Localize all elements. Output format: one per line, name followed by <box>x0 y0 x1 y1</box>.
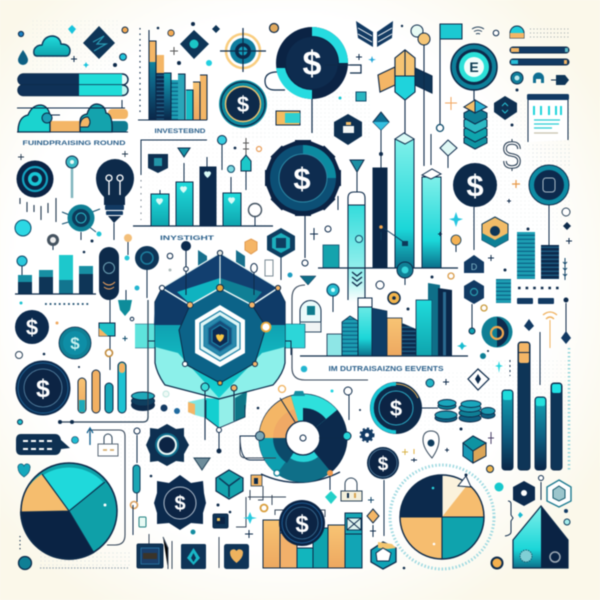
progress bars <box>18 74 128 96</box>
slider bars <box>510 47 569 65</box>
pie chart left <box>20 463 117 560</box>
small icons top left <box>18 25 128 68</box>
panel: invest chart <box>133 140 273 226</box>
icon: cloud <box>34 36 70 56</box>
small items centre lower <box>130 428 219 569</box>
lower tail <box>188 391 247 428</box>
bar chart: bottom centre <box>263 518 362 568</box>
icon: crossed box <box>345 513 362 534</box>
bottom left dot and dotted strip <box>18 536 128 570</box>
coin: dollar with ring: $ <box>390 396 402 421</box>
icon: 3D arrow block <box>378 50 432 135</box>
icon: coin stack left <box>132 392 154 410</box>
coin: dollar left top: $ <box>237 92 249 117</box>
icon: navy house: D <box>471 262 478 272</box>
wifi orange and spades <box>524 303 571 385</box>
dotted grid top right <box>530 29 570 37</box>
icon: chain link <box>505 139 519 171</box>
card: heart <box>224 544 249 569</box>
label: insight: INYSTIGHT <box>160 235 214 242</box>
icon: navy star gear <box>146 424 189 466</box>
pin fading <box>66 156 78 198</box>
top tabs <box>198 250 245 268</box>
icon: stacked rings <box>411 25 430 166</box>
central shield <box>135 241 305 454</box>
small icons right of shield <box>300 273 454 322</box>
gauge bars right <box>502 342 569 470</box>
icon: bronze dot <box>270 24 278 32</box>
icon: lock connector <box>292 285 368 380</box>
flag <box>436 24 462 132</box>
icon: orange hexagon core <box>482 217 508 247</box>
coin: dollar big left <box>16 360 70 416</box>
icon: wings <box>356 21 393 47</box>
small icons row <box>511 72 569 85</box>
lock diagram <box>87 428 125 545</box>
side band <box>135 324 305 355</box>
coin: dollar right <box>453 163 497 250</box>
gear with dollar <box>265 140 341 266</box>
small icons top middle <box>157 22 220 66</box>
icon: gear target <box>62 204 100 240</box>
card: flame <box>181 544 206 569</box>
icon: heart small <box>18 464 30 477</box>
icons top right row <box>493 26 524 38</box>
coin: big top dollar: $ <box>303 45 322 83</box>
icon: navy hex ring <box>464 280 487 334</box>
icon: pale diamond <box>431 134 457 168</box>
icon: light bulb <box>96 159 134 240</box>
icon: heart <box>216 334 224 342</box>
coin: chip <box>529 165 569 245</box>
white hexagon <box>195 305 245 367</box>
bar chart: lower left <box>15 255 96 294</box>
coin: dollar upper left <box>15 310 49 344</box>
icon: target <box>220 28 266 72</box>
label: investebnd: INVESTEBND <box>154 129 206 135</box>
coin: dollar big left: $ <box>36 375 50 403</box>
icon: orange square letter <box>251 475 262 486</box>
pie chart right <box>390 465 494 569</box>
icon: location pin <box>423 431 439 458</box>
bar chart: capsules <box>78 362 126 413</box>
concentric hexagons <box>200 311 240 361</box>
coin: dollar teal: $ <box>70 334 80 353</box>
pins invest chart <box>218 136 262 226</box>
coin: euro-style <box>451 44 497 100</box>
coin: dollar bottom centre <box>275 500 325 546</box>
connector lines lower centre <box>216 440 286 538</box>
connector loop <box>265 65 361 90</box>
icon: coin stacks <box>435 400 495 422</box>
edges and nodes <box>159 241 281 385</box>
coin: dollar with ring <box>370 382 438 434</box>
icon: gem <box>194 458 210 470</box>
teal wedge <box>155 322 285 398</box>
icon: navy gear <box>361 429 373 441</box>
small icons around <box>402 360 510 472</box>
icon: ring pentagon <box>371 542 396 569</box>
navy top <box>162 253 278 305</box>
icon: chip <box>213 514 228 528</box>
coin: big top dollar <box>276 27 356 133</box>
document panel <box>527 94 569 142</box>
coin: dollar left top <box>219 80 267 128</box>
icon: lock <box>325 478 374 504</box>
icon: orange dot <box>492 558 502 568</box>
icon: ticket <box>276 111 300 125</box>
icon: pentagon badge <box>148 154 168 173</box>
icon: target left <box>16 160 54 198</box>
icon: teal hexagon <box>265 228 295 280</box>
small dots right <box>338 25 518 126</box>
icon: navy hexagon <box>494 96 517 120</box>
icon: pin diamond <box>373 112 389 170</box>
icon: pill device <box>99 247 119 300</box>
heading: fundraising events: IM DUTRAISAIZNG EEVENTS <box>328 366 444 373</box>
coin: dollar on pin <box>367 447 399 536</box>
coin: dollar bottom centre: $ <box>295 511 309 538</box>
icon: star badge dollar: $ <box>174 493 186 515</box>
pin circle centre-left <box>135 246 173 298</box>
coin: euro-style: E <box>469 59 479 75</box>
outer pale body <box>155 288 285 399</box>
dots left middle <box>15 220 140 290</box>
right small icons <box>438 180 572 280</box>
tall bar chart right <box>310 133 458 302</box>
icon: cube <box>463 436 486 463</box>
triangle house <box>513 506 568 568</box>
donut chart <box>240 391 351 490</box>
coin: dollar teal <box>59 327 91 359</box>
icon: teal round badge <box>457 316 512 359</box>
coin: dollar upper left: $ <box>26 315 38 340</box>
icons near pie <box>367 509 405 569</box>
speech bubble <box>16 434 78 455</box>
pin outline <box>257 386 361 420</box>
gear with dollar: $ <box>293 161 311 196</box>
icon: navy diamond <box>83 26 115 59</box>
connector <box>18 300 180 424</box>
striped block and dots <box>496 279 568 304</box>
coin: dollar on pin: $ <box>378 454 389 475</box>
small icons left <box>16 302 128 368</box>
bar chart: city <box>300 283 468 356</box>
icon: orange hexagon <box>245 239 257 254</box>
inner hexagon <box>179 288 266 383</box>
ticks left <box>18 151 128 222</box>
icon: navy diamond with dot <box>180 30 209 59</box>
cloud bar panel <box>17 100 128 132</box>
bar chart: top <box>138 28 207 120</box>
heading: fundraising round: FUINDPRAISING ROUND <box>22 140 126 147</box>
icon: cube teal <box>216 470 243 499</box>
icon: layered cube stack <box>464 100 487 149</box>
navy side panels <box>154 288 190 325</box>
pin line and square <box>99 290 134 370</box>
bottom pins <box>201 383 237 454</box>
icon: wifi <box>472 27 484 34</box>
striped bars <box>517 232 559 279</box>
card: screen <box>137 544 163 568</box>
icon: navy house <box>464 255 484 273</box>
right bottom hexagons <box>494 476 571 536</box>
icon: star badge dollar <box>154 475 206 530</box>
coin: dollar right: $ <box>466 168 484 203</box>
icon: navy hexagon badge <box>334 114 362 145</box>
